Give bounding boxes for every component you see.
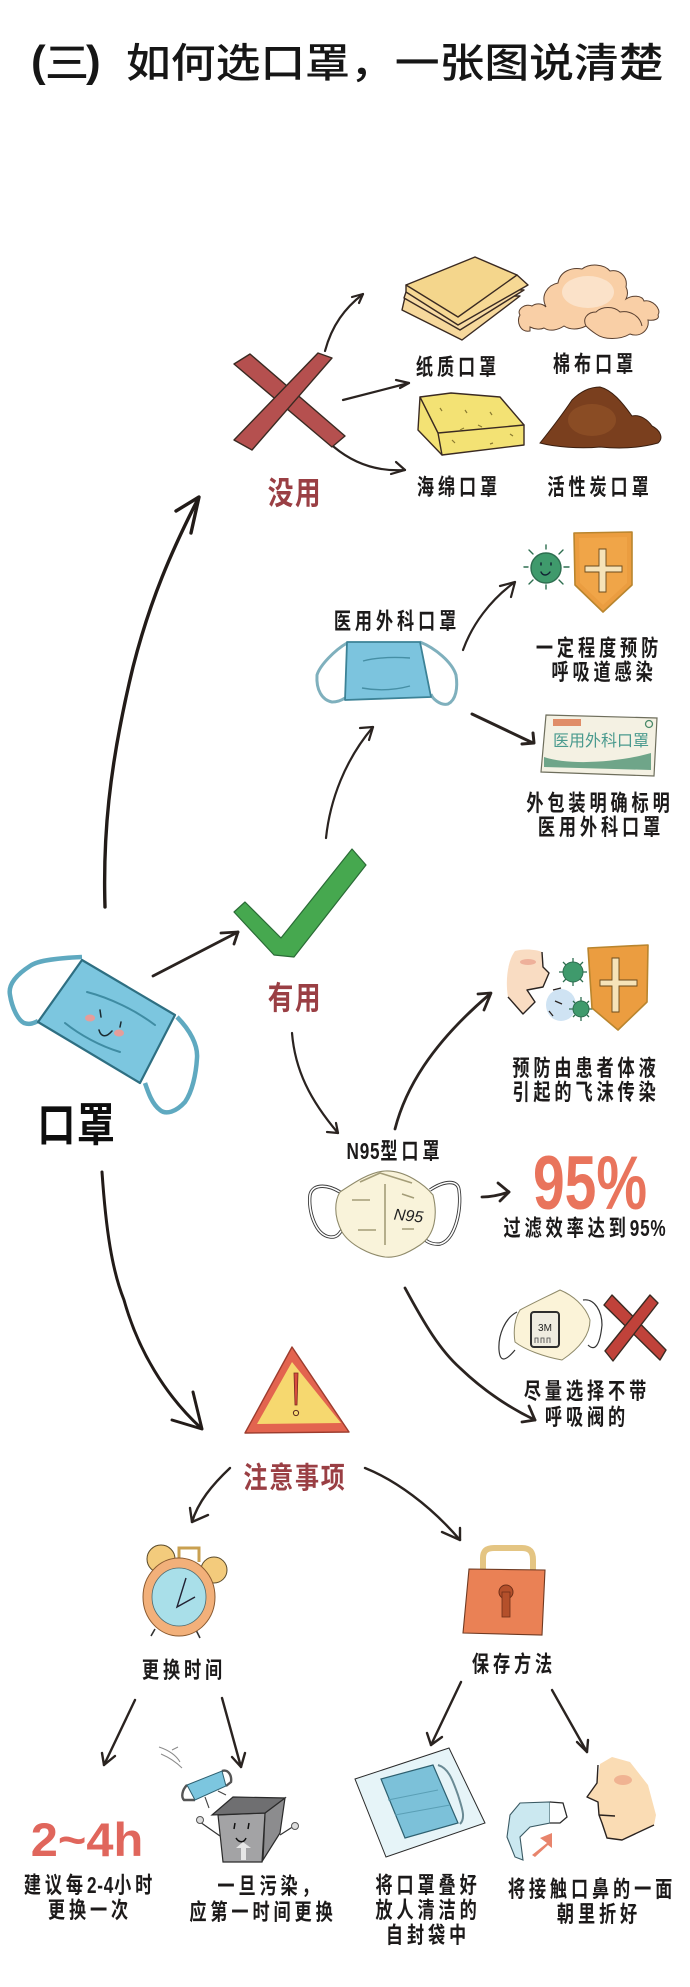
icon: mask packaging box: 医用外科口罩 [553, 727, 649, 751]
text: replace every 2-4 hours: 建议每2-4小时 [24, 1873, 156, 1899]
icon: shield [574, 532, 632, 612]
title: ( [31, 37, 46, 86]
icon: virus [524, 545, 569, 589]
arrows from storage method [427, 1682, 588, 1752]
label: sponge mask: 海绵口罩 [417, 475, 501, 501]
arrows from replacement time [102, 1698, 245, 1767]
icon: activated charcoal [540, 387, 661, 448]
text: fold and store in sealed bag: 自封袋中 [386, 1923, 470, 1949]
icon: mask in sealed bag [355, 1748, 485, 1857]
label: N95 mask: N95型口罩 [347, 1139, 443, 1165]
icon: paper stack [402, 257, 528, 340]
arrow to N95 [292, 1033, 338, 1133]
text: prevents respiratory infection: 一定程度预防 [536, 635, 662, 662]
icon: valved mask: 3M [538, 1323, 552, 1334]
text: package clearly labelled: 医用外科口罩 [538, 815, 664, 841]
sub-panel: N95 mask [310, 945, 666, 1431]
icon: red cross [234, 353, 345, 450]
text: replace immediately once contaminated [189, 1874, 337, 1926]
text: fold contact side inward [508, 1877, 676, 1928]
central mask with smiley face [10, 957, 197, 1112]
arrows from precautions [190, 1468, 460, 1540]
text: fold and store in sealed bag: 将口罩叠好 [375, 1873, 481, 1899]
text: replace every 2-4 hours: 更换一次 [48, 1898, 132, 1924]
text: prevents respiratory infection [536, 635, 662, 686]
sub-panel: storage method [355, 1548, 676, 1949]
icon: N95 mask: N95 [393, 1207, 424, 1227]
icon: alarm clock [143, 1545, 227, 1638]
icon: red cross small [604, 1295, 666, 1361]
icon: pink arrow [532, 1833, 552, 1857]
label: storage method: 保存方法 [472, 1651, 556, 1678]
icon: warning triangle [245, 1347, 349, 1433]
long arrow to useless [105, 497, 199, 907]
label: surgical mask: 医用外科口罩 [334, 609, 460, 635]
icon: green check [234, 849, 366, 957]
label: replacement time: 更换时间 [142, 1658, 226, 1684]
icon: trash bin [196, 1797, 298, 1862]
icon: valved mask [499, 1290, 602, 1360]
arrows from surgical mask [463, 582, 534, 744]
icon: folded mask [507, 1802, 567, 1860]
panel: useless masks [234, 257, 661, 512]
arrows to useless types [325, 294, 409, 474]
title: 三 [45, 31, 89, 89]
panel: useful masks [234, 532, 674, 1431]
text: fold and store in sealed bag [375, 1873, 481, 1949]
label: paper mask: 纸质口罩 [416, 355, 500, 381]
icon: padlock [463, 1548, 545, 1635]
label: cotton mask: 棉布口罩 [553, 352, 637, 378]
arrows from N95 mask [395, 993, 535, 1422]
text: fold and store in sealed bag: 放人清洁的 [375, 1898, 481, 1924]
text: fold contact side inward: 将接触口鼻的一面 [508, 1877, 676, 1903]
sub-panel: replacement time [24, 1545, 337, 1926]
big number 95%: 95% [533, 1141, 647, 1226]
icon: small mask thrown [182, 1771, 231, 1808]
text: replace every 2-4 hours [24, 1873, 156, 1924]
big text: 2-4h: 2~4h [31, 1815, 143, 1867]
text: choose without valve [524, 1379, 650, 1431]
text: choose without valve: 尽量选择不带 [524, 1379, 650, 1405]
icon: face with droplets and shield [507, 945, 648, 1030]
arrow to useful [153, 932, 238, 976]
icon: motion lines [159, 1747, 182, 1768]
text: prevents droplet infection: 预防由患者体液 [512, 1056, 660, 1082]
text: replace immediately once contaminated: 一旦污染， [217, 1874, 323, 1900]
text: prevents droplet infection: 引起的飞沫传染 [512, 1080, 660, 1106]
icon: face profile [587, 1757, 656, 1840]
text: prevents droplet infection [512, 1056, 660, 1106]
heading: useless: 没用 [268, 476, 322, 512]
text: choose without valve: 呼吸阀的 [545, 1405, 629, 1431]
icon: sponge [418, 393, 524, 455]
title [31, 31, 663, 89]
heading: useful: 有用 [268, 981, 322, 1017]
long arrow to precautions [102, 1172, 202, 1429]
sub-panel: surgical mask [317, 532, 674, 841]
text: package clearly labelled [526, 791, 674, 841]
central label: mask: 口罩 [38, 1089, 116, 1155]
text: replace immediately once contaminated: 应第一时间更换 [189, 1899, 337, 1926]
icon: mask packaging box [541, 715, 657, 776]
text: package clearly labelled: 外包装明确标明 [526, 791, 674, 817]
text: prevents respiratory infection: 呼吸道感染 [551, 660, 657, 686]
heading: precautions: 注意事项 [243, 1462, 347, 1495]
label: charcoal mask: 活性炭口罩 [547, 475, 653, 501]
text: fold contact side inward: 朝里折好 [557, 1902, 641, 1928]
text: filtration efficiency: 过滤效率达到95% [504, 1216, 666, 1242]
icon: surgical mask [317, 642, 457, 704]
icon: cotton [518, 265, 659, 338]
mask face [85, 1010, 124, 1036]
icon: N95 mask [310, 1171, 460, 1257]
arrow to surgical mask [326, 727, 373, 838]
title: ) [86, 37, 101, 86]
title: 如何选口罩，一张图说清楚 [126, 41, 663, 86]
panel: precautions [24, 1347, 676, 1949]
